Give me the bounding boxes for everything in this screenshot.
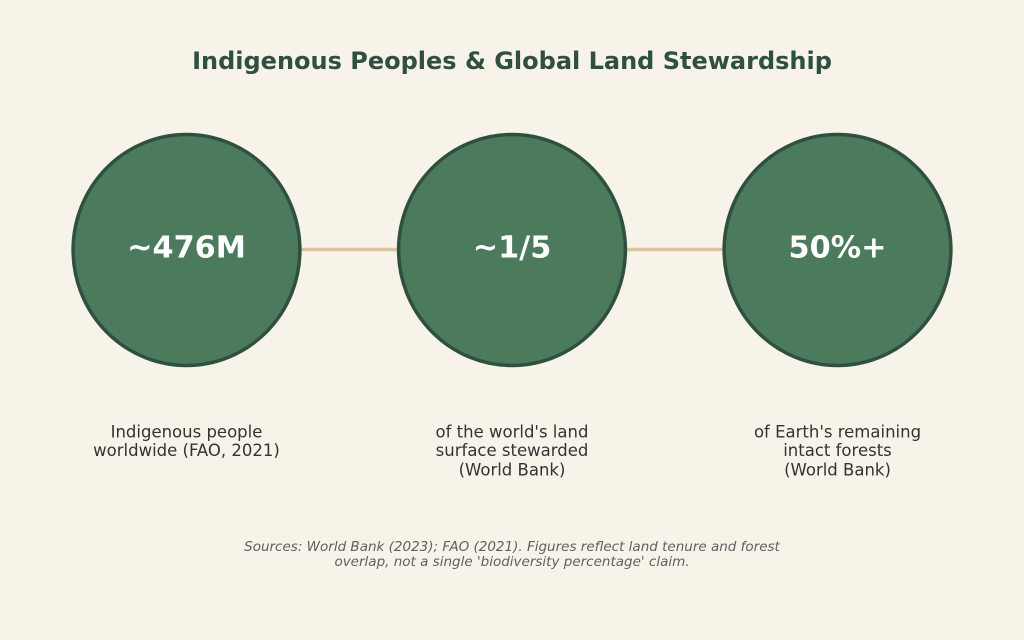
stat value: ~476M: ~476M <box>127 230 246 266</box>
title: Indigenous Peoples & Global Land Stewardship <box>192 47 832 75</box>
description: intact forests: intact forests <box>783 441 892 460</box>
circle: second stat <box>399 134 625 366</box>
source note: Sources: World Bank (2023); FAO (2021). Figures reflect land tenure and forest <box>244 539 781 555</box>
description: intact forests: (World Bank) <box>784 461 891 480</box>
description: land stewarded: of the world's land <box>436 422 588 442</box>
description: intact forests: of Earth's remaining <box>754 422 921 442</box>
circle: third stat <box>724 134 951 366</box>
connector: first to second circle <box>300 248 398 251</box>
panel: land stewarded stat <box>399 134 625 480</box>
panel: intact forests stat <box>724 134 951 480</box>
stat value: 50%+: 50%+ <box>789 230 886 266</box>
description: land stewarded: (World Bank) <box>459 461 565 480</box>
source note: overlap, not a single 'biodiversity percentage' claim. <box>334 554 690 570</box>
stat value: ~1/5: ~1/5 <box>473 230 551 266</box>
description: indigenous people: worldwide (FAO, 2021) <box>93 441 280 460</box>
connector: second to third circle <box>625 248 724 251</box>
description: land stewarded: surface stewarded <box>436 441 588 460</box>
panel: indigenous people stat <box>73 134 300 460</box>
description: indigenous people: Indigenous people <box>111 422 262 442</box>
circle: first stat <box>73 134 300 366</box>
